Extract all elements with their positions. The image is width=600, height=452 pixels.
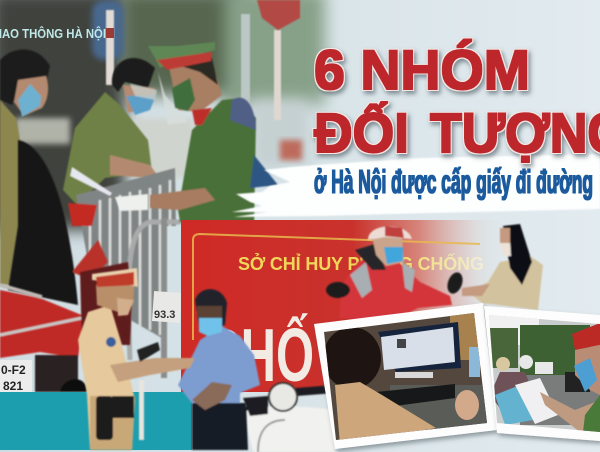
banner yellow frame [193, 234, 480, 340]
banner yellow heading: SỞ CHỈ HUY PHÒNG CHỐNG [238, 253, 484, 274]
traffic police officer [78, 268, 195, 450]
officer with goggles [63, 58, 158, 205]
title line 1: 6 NHÓM [314, 38, 530, 101]
red scooter [0, 240, 132, 392]
police officer with face shield [70, 42, 278, 232]
licence plate F2: 0-F2 [1, 363, 26, 377]
title line 2 first word: ĐỐI [314, 101, 409, 164]
woman in beige jacket [462, 224, 543, 310]
man in blue shirt with helmet [178, 289, 260, 450]
photo frame: officer at computer [314, 303, 497, 449]
white brush banner [232, 154, 600, 217]
lower right white scooter [224, 383, 348, 452]
licence plate F2 [0, 360, 32, 393]
red banner [181, 220, 511, 397]
licence plate 93: 93.3 [154, 309, 175, 321]
licence plate 93 [152, 291, 182, 323]
man in camouflage shirt and mask [0, 49, 50, 285]
barrier fences [68, 168, 181, 378]
title [314, 38, 600, 200]
licence plate F2: 821 [3, 379, 23, 393]
banner large word: PHỐ [208, 313, 314, 397]
document check photo [485, 312, 600, 437]
photo frame: officer checking documents [484, 306, 600, 441]
teal band [0, 392, 192, 450]
background photo: blurred street with trees [0, 0, 325, 230]
black scooter shield [8, 140, 78, 305]
computer photo [324, 313, 487, 440]
delivery rider in red jacket [326, 226, 465, 320]
